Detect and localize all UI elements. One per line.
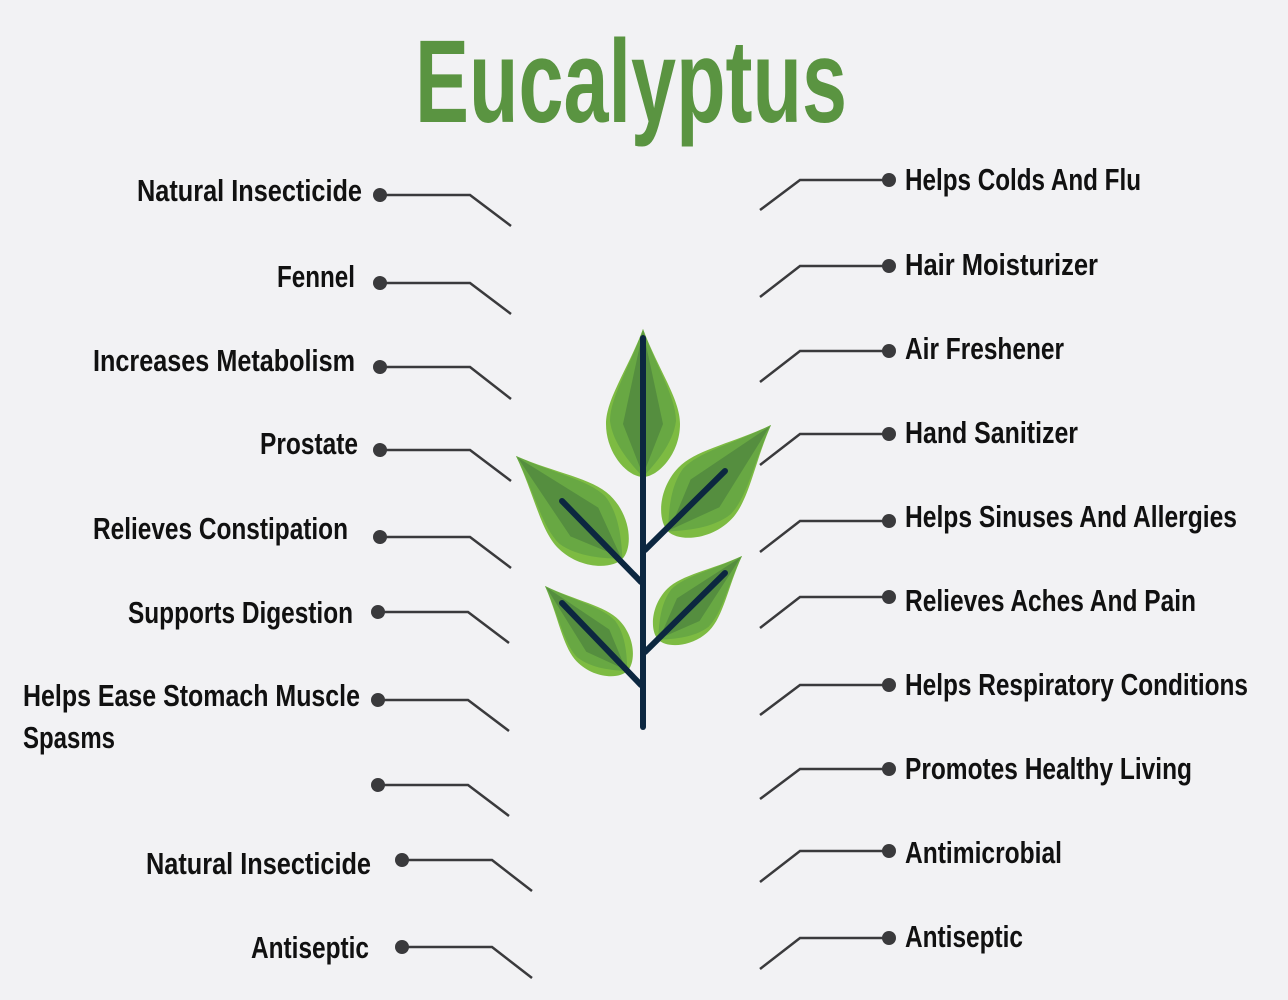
left labels: Natural Insecticide [146,846,371,881]
right labels: Antiseptic [905,919,1023,954]
left connectors [378,195,532,978]
left labels: Supports Digestion [128,595,353,630]
right connectors [760,180,889,969]
right labels: Air Freshener [905,331,1064,366]
right labels [905,162,1248,954]
left labels: Spasms [23,720,115,755]
right labels: Antimicrobial [905,835,1062,870]
left labels [23,173,371,965]
left labels: Relieves Constipation [93,511,348,546]
title: Eucalyptus [415,16,847,148]
left labels: Antiseptic [251,930,369,965]
left labels: Fennel [277,259,355,294]
right labels: Relieves Aches And Pain [905,583,1196,618]
right labels: Hand Sanitizer [905,415,1078,450]
left labels: Increases Metabolism [93,343,355,378]
left labels: Prostate [260,426,358,461]
left labels: Natural Insecticide [137,173,362,208]
right labels: Promotes Healthy Living [905,751,1192,786]
plant illustration [490,329,798,727]
left labels: Helps Ease Stomach Muscle [23,678,360,713]
right labels: Hair Moisturizer [905,247,1098,282]
right labels: Helps Colds And Flu [905,162,1141,197]
